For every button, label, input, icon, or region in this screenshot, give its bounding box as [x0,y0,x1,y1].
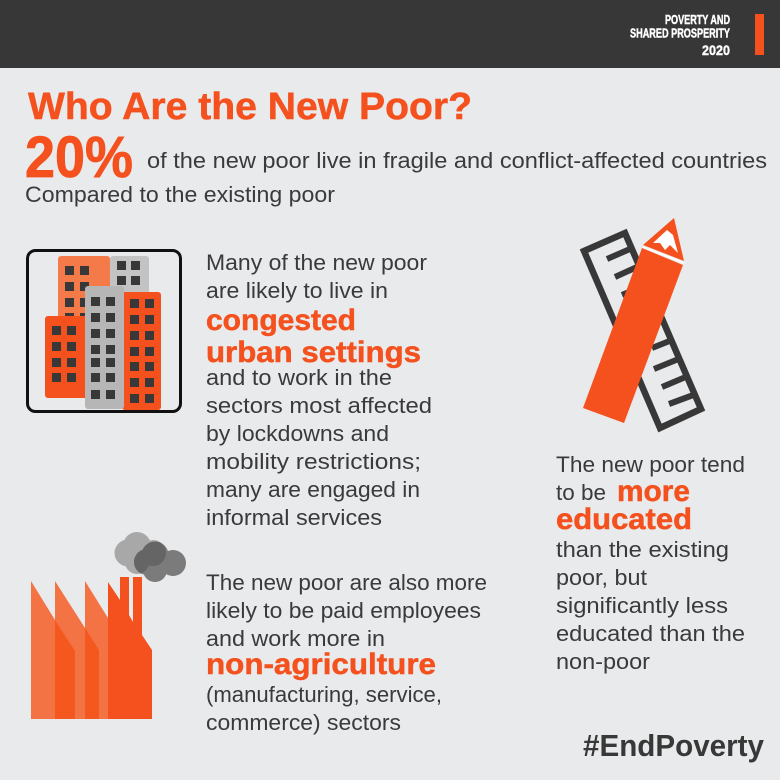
header accent bar [755,14,764,55]
text block: urban settings: by lockdowns and [206,421,389,446]
text block: more educated: poor, but [556,565,647,590]
text block: urban settings: and to work in the [206,365,392,390]
header band [0,0,780,68]
header label: SHARED PROSPERITY [630,26,730,40]
text block: non-agriculture: and work more in [206,626,385,651]
icon: city buildings [28,250,180,412]
text block: more educated: to be [556,480,606,505]
text block: more educated: The new poor tend [556,452,745,477]
text block: non-agriculture [206,570,487,735]
text block: urban settings [206,250,432,530]
text block: non-agriculture: (manufacturing, service, [206,682,442,707]
statistic: 20%: 20% [25,125,133,190]
header label: POVERTY AND [665,13,730,27]
text block: non-agriculture: The new poor are also more [206,570,487,595]
text block: urban settings: Many of the new poor [206,250,427,275]
text block: more educated: than the existing [556,537,729,562]
statistic description: of the new poor live in fragile and conflict-affected countries [147,148,767,173]
icon: ruler and pencil [583,218,701,428]
text block: urban settings: urban settings [206,336,421,369]
text block: non-agriculture: non-agriculture [206,648,436,681]
subheading: Compared to the existing poor [25,182,335,207]
text block: non-agriculture: likely to be paid employees [206,598,481,623]
text block: urban settings: sectors most affected [206,393,432,418]
text block: urban settings: congested [206,304,356,337]
icon: factory with smoke [31,532,186,719]
header label [630,13,730,58]
hashtag: #EndPoverty [583,728,765,763]
text block: non-agriculture: commerce) sectors [206,710,401,735]
text block: urban settings: many are engaged in [206,477,420,502]
text block: urban settings: mobility restrictions; [206,449,421,474]
text block: more educated: significantly less [556,593,728,618]
text block: more educated: educated than the [556,621,745,646]
text block: urban settings: informal services [206,505,382,530]
text block: urban settings: are likely to live in [206,278,388,303]
title: Who Are the New Poor? [28,86,472,128]
header label: 2020 [702,42,730,58]
text block: more educated: more [617,475,690,508]
text block: more educated: non-poor [556,649,650,674]
text block: more educated: educated [556,503,692,536]
text block: more educated [556,452,745,674]
